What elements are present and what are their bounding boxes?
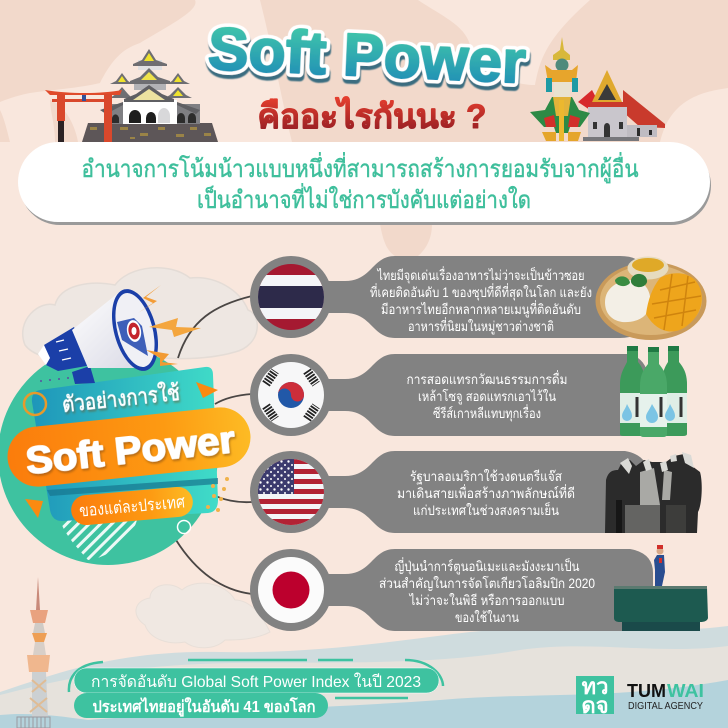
- pill top: [74, 668, 439, 693]
- soju bottles: [620, 346, 687, 437]
- text: การสอดแทรกวัฒนธรรมการดื่ม: [406, 370, 568, 387]
- text: [397, 468, 575, 518]
- badge: example of Soft Power: [0, 345, 253, 565]
- text: ที่เคยติดอันดับ 1 ของซุปที่ดีที่สุดในโลก และยัง: [370, 283, 592, 301]
- text: ไทยมีจุดเด่นเรื่องอาหารไม่ว่าจะเป็นข้าวซอย: [377, 266, 584, 284]
- sparks: [138, 285, 161, 313]
- text: รัฐบาลอเมริกาใช้วงดนตรีแจ๊ส: [410, 468, 562, 485]
- title: Soft Power: [207, 15, 527, 96]
- icon: Japanese castle and torii gate: [45, 49, 218, 142]
- icon: Thai giant guardian and temple: [530, 37, 665, 141]
- orange pill: [5, 404, 253, 490]
- flag: USA: [258, 459, 324, 525]
- definition panel: [18, 142, 711, 225]
- flag: Japan: [258, 557, 324, 623]
- pill: [291, 549, 653, 631]
- text: [406, 370, 568, 422]
- banner text top: ตัวอย่างการใช้: [61, 380, 181, 417]
- text: ซีรีส์เกาหลีแทบทุกเรื่อง: [433, 404, 541, 422]
- castle stone base: [82, 123, 218, 142]
- logo: TUMWAI: DIGITAL AGENCY: [628, 700, 703, 712]
- logo: ทวดจ: [576, 674, 614, 718]
- photo: jazz group: [605, 452, 702, 533]
- panel: USA: [250, 451, 702, 533]
- panel: Korea: [250, 346, 687, 437]
- text: แก่ประเทศในช่วงสงครามเย็น: [413, 501, 559, 518]
- text: มาเดินสายเพื่อสร้างภาพลักษณ์ที่ดี: [397, 484, 575, 501]
- photo: Mario pipe: [614, 545, 708, 631]
- callout: Global Soft Power Index: ประเทศไทยอยู่ในอันดับ 41 ของโลก: [92, 696, 316, 718]
- teal banner: [32, 367, 218, 521]
- flag: Korea: [258, 362, 324, 428]
- text: อาหารที่นิยมในหมู่ชาวต่างชาติ: [408, 317, 554, 335]
- definition panel: อำนาจการโน้มน้าวแบบหนึ่งที่สามารถสร้างการยอมรับจากผู้อื่น: [82, 152, 638, 184]
- cloud: behind megaphone: [23, 268, 257, 360]
- definition panel: เป็นอำนาจที่ไม่ใช่การบังคับแต่อย่างใด: [197, 183, 531, 214]
- text: [379, 557, 595, 625]
- castle walls: [104, 104, 200, 124]
- title: Soft Power: [207, 15, 527, 96]
- triangles: [196, 382, 218, 398]
- food: mango sticky rice: [596, 256, 706, 340]
- hatch decoration: [60, 520, 137, 560]
- small pill: [70, 486, 194, 526]
- dots: [206, 477, 229, 512]
- text: มีอาหารไทยอีกหลากหลายเมนูที่ติดอันดับ: [381, 300, 581, 318]
- panel: Japan: [250, 545, 708, 631]
- castle roofs: [133, 49, 167, 66]
- decorative outline strokes: [69, 660, 443, 698]
- subtitle: คืออะไรกันนะ ?: [258, 96, 486, 136]
- orange pill: Soft Power: [24, 419, 237, 483]
- logo: ทวดจ: ดจ: [581, 693, 609, 718]
- text: ส่วนสำคัญในการจัดโตเกียวโอลิมปิก 2020: [379, 575, 595, 591]
- callout: Global Soft Power Index: การจัดอันดับ Global Soft Power Index ในปี 2023: [91, 672, 421, 691]
- flag: Thailand: [258, 264, 324, 330]
- text: ญี่ปุ่นนำการ์ตูนอนิเมะและมังงะมาเป็น: [394, 557, 580, 575]
- logo: TUMWAI: WAI: [667, 680, 704, 701]
- pill: [291, 354, 648, 436]
- pill bottom: [74, 693, 328, 718]
- logo: ทวดจ: ทว: [582, 674, 608, 699]
- ring decorations: [24, 393, 46, 415]
- pill: [291, 256, 645, 338]
- text: เหล้าโซจู สอดแทรกเอาไว้ใน: [418, 388, 556, 405]
- text: ไม่ว่าจะในพิธี หรือการออกแบบ: [409, 592, 564, 608]
- text: ของใช้ในงาน: [455, 609, 519, 625]
- badge circle: [0, 345, 218, 565]
- torii: [45, 90, 122, 95]
- text: [370, 266, 592, 335]
- panel: Thailand: [250, 256, 706, 340]
- callout: Global Soft Power Index: [69, 660, 443, 718]
- cloud: lower: [136, 583, 270, 648]
- pill: [291, 451, 648, 533]
- small pill: ของแต่ละประเทศ: [78, 492, 186, 521]
- logo: TUMWAI: [627, 680, 704, 712]
- temple: [623, 90, 665, 128]
- giant: [553, 37, 570, 60]
- logo: TUMWAI: TUM: [627, 680, 666, 701]
- icon: megaphone: [38, 284, 201, 384]
- connector lines: [176, 296, 252, 594]
- tower: [17, 577, 50, 728]
- water waves: [0, 626, 728, 728]
